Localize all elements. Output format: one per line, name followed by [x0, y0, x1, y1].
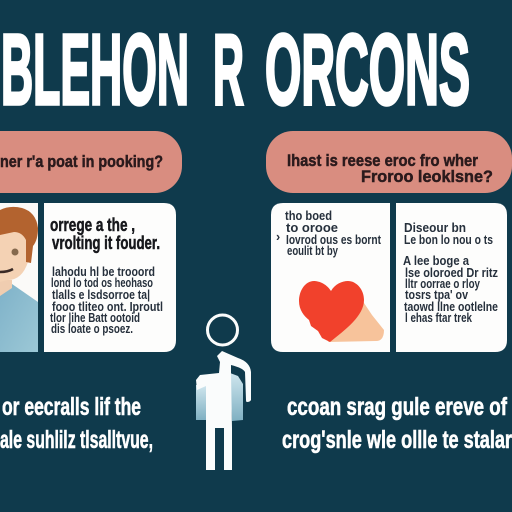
card body text: tosrs tpa' ov — [405, 288, 468, 302]
card heading text: Le bon lo nou o ts — [404, 233, 493, 247]
card body text — [403, 254, 498, 325]
card heading text: Diseour bn — [404, 221, 466, 235]
card text: › — [276, 230, 280, 244]
card body text: l ehas ftar trek — [405, 311, 472, 325]
card body text: lltr oorrae o rloy — [405, 277, 480, 291]
right caption — [282, 393, 512, 454]
title: R — [213, 14, 244, 126]
title: BLEHON — [1, 14, 189, 126]
card text — [276, 209, 382, 258]
card body text: A lee boge a — [403, 254, 470, 268]
card text: to orooe — [286, 221, 338, 235]
left caption: or eecralls lif the — [2, 393, 141, 421]
icon: portrait of a man — [0, 207, 38, 352]
panel: right question pill: Ihast is reese eroc fro wher — [287, 151, 478, 170]
icon: standing person — [196, 315, 251, 470]
icon: heart held by hand — [299, 281, 384, 342]
card text: Iovrod ous es bornt — [286, 233, 382, 247]
card body text: lond lo tod os heohaso — [51, 276, 153, 290]
card body text: lahodu hl be trooord — [52, 265, 155, 279]
left caption: ale suhlilz tlsalltvue, — [0, 426, 153, 454]
card body text: tlor |ihe Batt ootoid — [50, 311, 140, 325]
panel: left text card — [44, 203, 176, 352]
panel: left question pill: ner r'a poat in pooking? — [0, 152, 163, 171]
panel: heart card — [271, 203, 390, 352]
card body text: lse oloroed Dr ritz — [405, 266, 498, 280]
card body text: dis loate o psoez. — [51, 322, 133, 336]
card heading: vrolting it fouder. — [52, 233, 160, 253]
card body text — [50, 265, 163, 336]
card text: tho boed — [285, 209, 332, 223]
panel: right question pill — [266, 131, 512, 193]
card heading — [50, 215, 160, 253]
left caption — [0, 393, 153, 454]
panel: right question pill: Froroo leoklsne? — [361, 167, 493, 186]
card body text: fooo tliteo ont. Iproutl — [52, 300, 163, 314]
card heading: orrege a the , — [50, 215, 135, 235]
panel: left question pill — [0, 131, 182, 193]
panel: portrait card — [0, 203, 38, 352]
card heading text — [404, 221, 493, 247]
card text: eoulit bt by — [287, 244, 338, 258]
card body text: tlalls e lsdsorroe ta| — [52, 288, 150, 302]
panel: right text card — [396, 203, 507, 352]
